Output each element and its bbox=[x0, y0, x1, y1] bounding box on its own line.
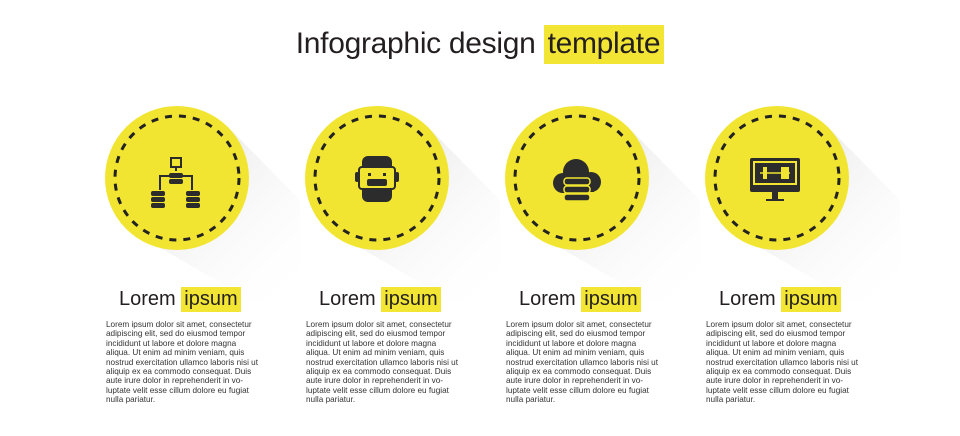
text block: nulla pariatur. bbox=[106, 395, 155, 404]
text block: incididunt ut labore et dolore magna bbox=[106, 339, 236, 348]
text block: adipiscing elit, sed do eiusmod tempor bbox=[306, 329, 445, 338]
text block: aliquip ex ea commodo consequat. Duis bbox=[106, 367, 251, 376]
text block: luptate velit esse cillum dolore eu fugiat bbox=[106, 386, 249, 395]
text block: aliqua. Ut enim ad minim veniam, quis bbox=[506, 348, 644, 357]
text block: aliquip ex ea commodo consequat. Duis bbox=[506, 367, 651, 376]
text block: adipiscing elit, sed do eiusmod tempor bbox=[106, 329, 245, 338]
text block: luptate velit esse cillum dolore eu fugiat bbox=[306, 386, 449, 395]
text block: aute irure dolor in reprehenderit in vo- bbox=[706, 376, 843, 385]
heading: Lorem ipsum bbox=[119, 288, 238, 310]
text block: nulla pariatur. bbox=[706, 395, 755, 404]
text block: aliqua. Ut enim ad minim veniam, quis bbox=[306, 348, 444, 357]
text block: aliqua. Ut enim ad minim veniam, quis bbox=[706, 348, 844, 357]
title: Infographic design template bbox=[296, 27, 660, 60]
text block bbox=[706, 320, 858, 404]
text block: adipiscing elit, sed do eiusmod tempor bbox=[506, 329, 645, 338]
text block: aliquip ex ea commodo consequat. Duis bbox=[306, 367, 451, 376]
text block: nostrud exercitation ullamco laboris nisi ut bbox=[706, 358, 858, 367]
text block: luptate velit esse cillum dolore eu fugiat bbox=[506, 386, 649, 395]
text block: aliqua. Ut enim ad minim veniam, quis bbox=[106, 348, 244, 357]
circle with icon: monitor bbox=[705, 106, 868, 258]
text block: incididunt ut labore et dolore magna bbox=[506, 339, 636, 348]
circle with icon: hierarchy databases bbox=[105, 106, 268, 258]
text block: Lorem ipsum dolor sit amet, consectetur bbox=[306, 320, 452, 329]
panel: step 4 bbox=[705, 106, 868, 404]
text block: nostrud exercitation ullamco laboris nisi ut bbox=[506, 358, 658, 367]
text block bbox=[306, 320, 458, 404]
text block: aute irure dolor in reprehenderit in vo- bbox=[306, 376, 443, 385]
text block: incididunt ut labore et dolore magna bbox=[306, 339, 436, 348]
text block: adipiscing elit, sed do eiusmod tempor bbox=[706, 329, 845, 338]
circle with icon: robot bbox=[305, 106, 470, 258]
text block bbox=[506, 320, 658, 404]
heading: Lorem ipsum bbox=[319, 288, 438, 310]
text block: nulla pariatur. bbox=[506, 395, 555, 404]
text block: nulla pariatur. bbox=[306, 395, 355, 404]
text block: Lorem ipsum dolor sit amet, consectetur bbox=[106, 320, 252, 329]
text block: nostrud exercitation ullamco laboris nisi ut bbox=[106, 358, 258, 367]
panel: step 1 bbox=[105, 106, 268, 404]
text block: aliquip ex ea commodo consequat. Duis bbox=[706, 367, 851, 376]
circle with icon: cloud database bbox=[505, 106, 668, 258]
text block: luptate velit esse cillum dolore eu fugiat bbox=[706, 386, 849, 395]
text block: nostrud exercitation ullamco laboris nisi ut bbox=[306, 358, 458, 367]
heading: Lorem ipsum bbox=[719, 288, 838, 310]
panel: step 3 bbox=[505, 106, 668, 404]
text block: aute irure dolor in reprehenderit in vo- bbox=[106, 376, 243, 385]
text block: aute irure dolor in reprehenderit in vo- bbox=[506, 376, 643, 385]
text block bbox=[106, 320, 258, 404]
panel: step 2 bbox=[305, 106, 470, 404]
text block: Lorem ipsum dolor sit amet, consectetur bbox=[506, 320, 652, 329]
heading: Lorem ipsum bbox=[519, 288, 638, 310]
text block: incididunt ut labore et dolore magna bbox=[706, 339, 836, 348]
text block: Lorem ipsum dolor sit amet, consectetur bbox=[706, 320, 852, 329]
